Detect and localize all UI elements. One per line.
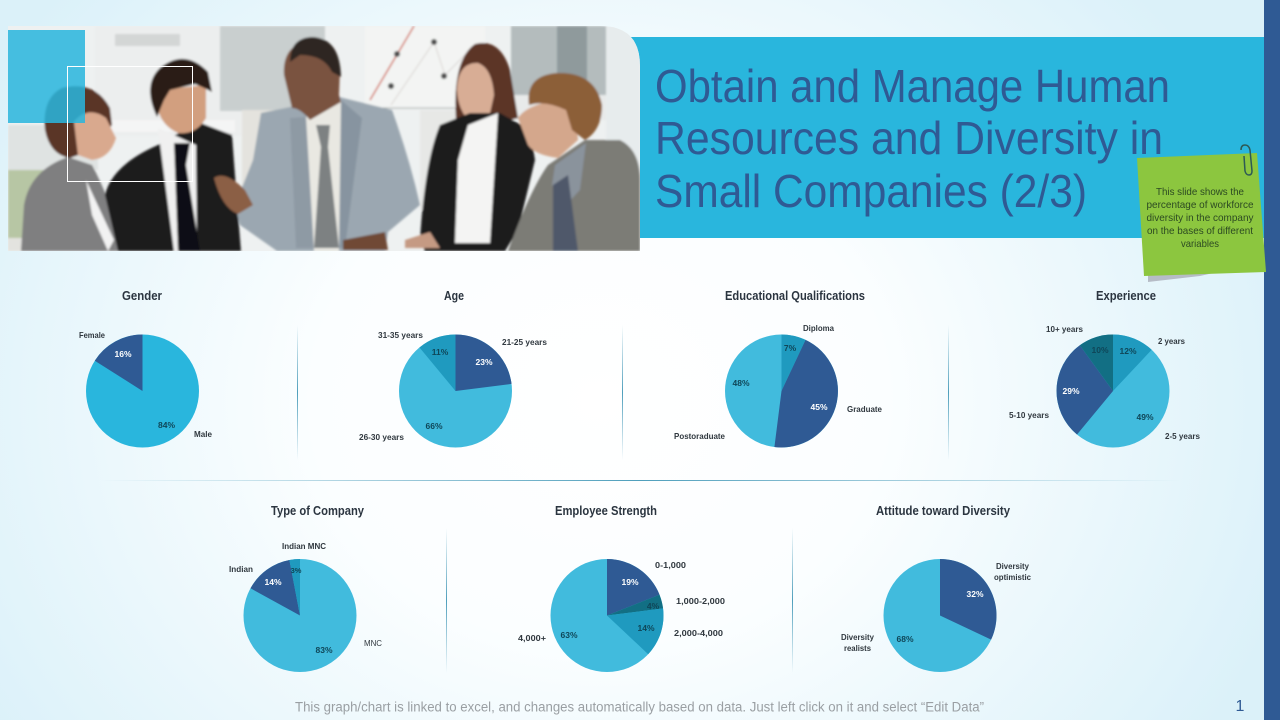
- note text: on the bases of different: [1147, 225, 1253, 237]
- title: [655, 60, 1170, 217]
- note text: variables: [1181, 238, 1219, 250]
- pie chart: employee strength: 63%: [560, 630, 578, 640]
- pie chart: type of company: 3%: [291, 566, 302, 575]
- icon: paperclip: [1241, 145, 1252, 175]
- panel: employee strength: Employee Strength: [555, 504, 657, 518]
- dividers: [297, 325, 298, 460]
- panel: age: [359, 289, 547, 448]
- pie chart: experience: 49%: [1136, 412, 1154, 422]
- panel: employee strength: 1,000-2,000: [676, 596, 725, 606]
- panel: type of company: [229, 504, 382, 672]
- footer note: This graph/chart is linked to excel, and changes automatically based on data. Just left click on it and select “Edit Data”: [295, 700, 984, 714]
- pie chart: educational qualifications: [725, 334, 838, 448]
- panel: type of company: MNC: [364, 638, 382, 648]
- panel: educational qualifications: Graduate: [847, 404, 882, 414]
- panel: experience: [1009, 289, 1200, 448]
- panel: employee strength: 2,000-4,000: [674, 628, 723, 638]
- pie chart: age: 66%: [425, 421, 443, 431]
- panel: age: 31-35 years: [378, 330, 423, 340]
- note paper: [1137, 153, 1266, 276]
- pie chart: employee strength: 14%: [637, 623, 655, 633]
- panel: gender: Female: [79, 330, 105, 340]
- pie chart: type of company: 83%: [315, 645, 333, 655]
- woman right: [455, 43, 518, 125]
- panel: educational qualifications: [674, 289, 882, 448]
- pie chart: type of company: 14%: [264, 577, 282, 587]
- note shadow: [1148, 262, 1262, 282]
- title: Resources and Diversity in: [655, 112, 1163, 164]
- panel: experience: 2-5 years: [1165, 431, 1200, 441]
- panel: educational qualifications: Postoraduate: [674, 431, 725, 441]
- panel: educational qualifications: Educational Qualifications: [725, 289, 865, 303]
- pie chart: age: [399, 334, 512, 448]
- panel: gender: Male: [194, 429, 212, 439]
- panel: type of company: Type of Company: [271, 504, 364, 518]
- woman left: [21, 157, 127, 251]
- panel: age: Age: [444, 289, 464, 303]
- pie chart: gender: [86, 334, 199, 448]
- panel: employee strength: [518, 504, 725, 672]
- panel: experience: Experience: [1096, 289, 1156, 303]
- title: Obtain and Manage Human: [655, 60, 1170, 112]
- photo overlay: white outline frame: [68, 66, 192, 182]
- man right: [508, 140, 640, 251]
- center man: [235, 97, 420, 251]
- pie chart: educational qualifications: 48%: [732, 378, 750, 388]
- pie chart: attitude toward diversity: [884, 559, 996, 672]
- pie chart: educational qualifications: 45%: [810, 402, 828, 412]
- pie chart: employee strength: [550, 559, 664, 672]
- pie chart: experience: 10%: [1091, 345, 1109, 355]
- title: Small Companies (2/3): [655, 165, 1087, 217]
- note text: This slide shows the: [1156, 186, 1244, 198]
- pie chart: experience: 29%: [1062, 386, 1080, 396]
- sticky note: [1137, 145, 1266, 282]
- panel: gender: [79, 289, 212, 448]
- panel: experience: 2 years: [1158, 336, 1185, 346]
- panel: experience: 5-10 years: [1009, 410, 1049, 420]
- note text: diversity in the company: [1146, 212, 1254, 224]
- pie chart: age: 23%: [475, 357, 493, 367]
- pie chart: educational qualifications: 7%: [784, 343, 797, 353]
- pie chart: attitude toward diversity: 68%: [896, 634, 914, 644]
- note text: percentage of workforce: [1146, 199, 1254, 211]
- photo overlay: blue square: [8, 30, 85, 123]
- panel: experience: 10+ years: [1046, 324, 1083, 334]
- panel: employee strength: 0-1,000: [655, 560, 686, 570]
- pie chart: experience: 12%: [1119, 346, 1137, 356]
- pie chart: employee strength: 19%: [621, 577, 639, 587]
- page number: 1: [1236, 698, 1245, 715]
- panel: age: 26-30 years: [359, 432, 404, 442]
- panel: type of company: Indian: [229, 564, 253, 574]
- pie chart: attitude toward diversity: 32%: [966, 589, 984, 599]
- panel: attitude toward diversity: Diversity: [996, 561, 1029, 571]
- panel: age: 21-25 years: [502, 337, 547, 347]
- panel: educational qualifications: Diploma: [803, 323, 834, 333]
- note text: [1146, 186, 1254, 250]
- panel: attitude toward diversity: realists: [844, 643, 871, 653]
- panel: employee strength: 4,000+: [518, 633, 546, 643]
- panel: attitude toward diversity: [841, 504, 1031, 672]
- panel: type of company: Indian MNC: [282, 541, 326, 551]
- right sidebar: [1264, 0, 1280, 720]
- panel: gender: Gender: [122, 289, 162, 303]
- title band: [630, 37, 1264, 238]
- panel: attitude toward diversity: Attitude toward Diversity: [876, 504, 1010, 518]
- pie chart: gender: 84%: [158, 420, 175, 430]
- man in black suit: [105, 122, 241, 251]
- pie chart: gender: 16%: [114, 349, 132, 359]
- pie chart: experience: [1056, 334, 1170, 448]
- panel: attitude toward diversity: Diversity: [841, 632, 874, 642]
- pie chart: age: 11%: [432, 347, 449, 357]
- pie chart: type of company: [244, 559, 356, 672]
- photo: business team meeting: [8, 26, 640, 251]
- pie chart: employee strength: 4%: [647, 601, 660, 611]
- panel: attitude toward diversity: optimistic: [994, 572, 1031, 582]
